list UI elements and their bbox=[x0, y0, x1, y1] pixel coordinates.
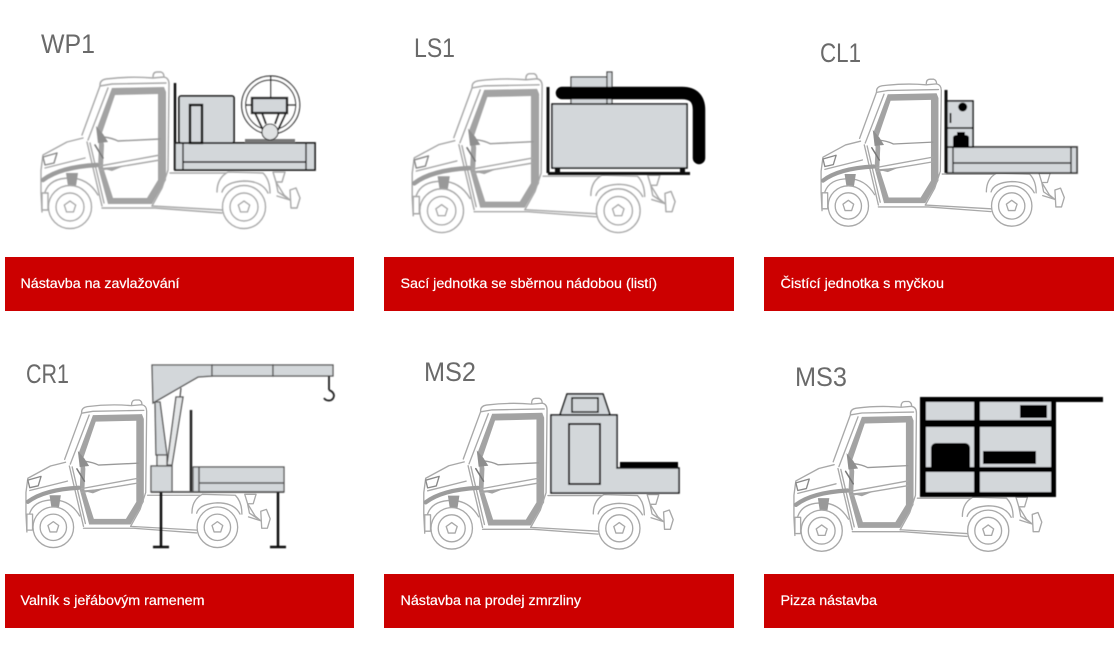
panel: CR1 bbox=[5, 359, 354, 628]
suction unit attachment bbox=[548, 72, 699, 175]
caption: Nástavba na prodej zmrzliny bbox=[400, 592, 581, 608]
panel: WP1 bbox=[5, 29, 354, 311]
panel: MS3 bbox=[764, 362, 1114, 628]
caption bar bbox=[5, 574, 354, 628]
vehicle illustration bbox=[41, 72, 300, 228]
panel: LS1 bbox=[384, 33, 734, 311]
caption: Čistící jednotka s myčkou bbox=[780, 275, 944, 291]
model code CR1: CR1 bbox=[26, 359, 69, 389]
caption bar bbox=[5, 257, 354, 311]
vehicle illustration bbox=[412, 74, 675, 233]
crane attachment bbox=[151, 365, 334, 547]
model code WP1: WP1 bbox=[41, 29, 95, 59]
ice cream attachment bbox=[551, 394, 679, 493]
caption: Sací jednotka se sběrnou nádobou (listí) bbox=[400, 275, 657, 291]
model code LS1: LS1 bbox=[414, 33, 455, 63]
caption: Pizza nástavba bbox=[780, 592, 877, 608]
model code MS2: MS2 bbox=[424, 357, 476, 387]
caption: Valník s jeřábovým ramenem bbox=[20, 592, 204, 608]
vehicle illustration bbox=[794, 402, 1042, 551]
caption bar bbox=[764, 257, 1114, 311]
caption: Nástavba na zavlažování bbox=[20, 275, 180, 291]
washer attachment bbox=[946, 90, 1077, 173]
caption bar bbox=[384, 257, 734, 311]
caption bar bbox=[764, 574, 1114, 628]
model code CL1: CL1 bbox=[820, 38, 861, 68]
panel: CL1 bbox=[764, 38, 1114, 311]
caption bar bbox=[384, 574, 734, 628]
pizza attachment bbox=[920, 397, 1103, 497]
vehicle illustration bbox=[424, 398, 673, 549]
model code MS3: MS3 bbox=[795, 362, 847, 392]
vehicle illustration bbox=[26, 400, 270, 548]
irrigation attachment bbox=[175, 76, 315, 170]
panel: MS2 bbox=[384, 357, 734, 628]
vehicle illustration bbox=[821, 79, 1064, 226]
